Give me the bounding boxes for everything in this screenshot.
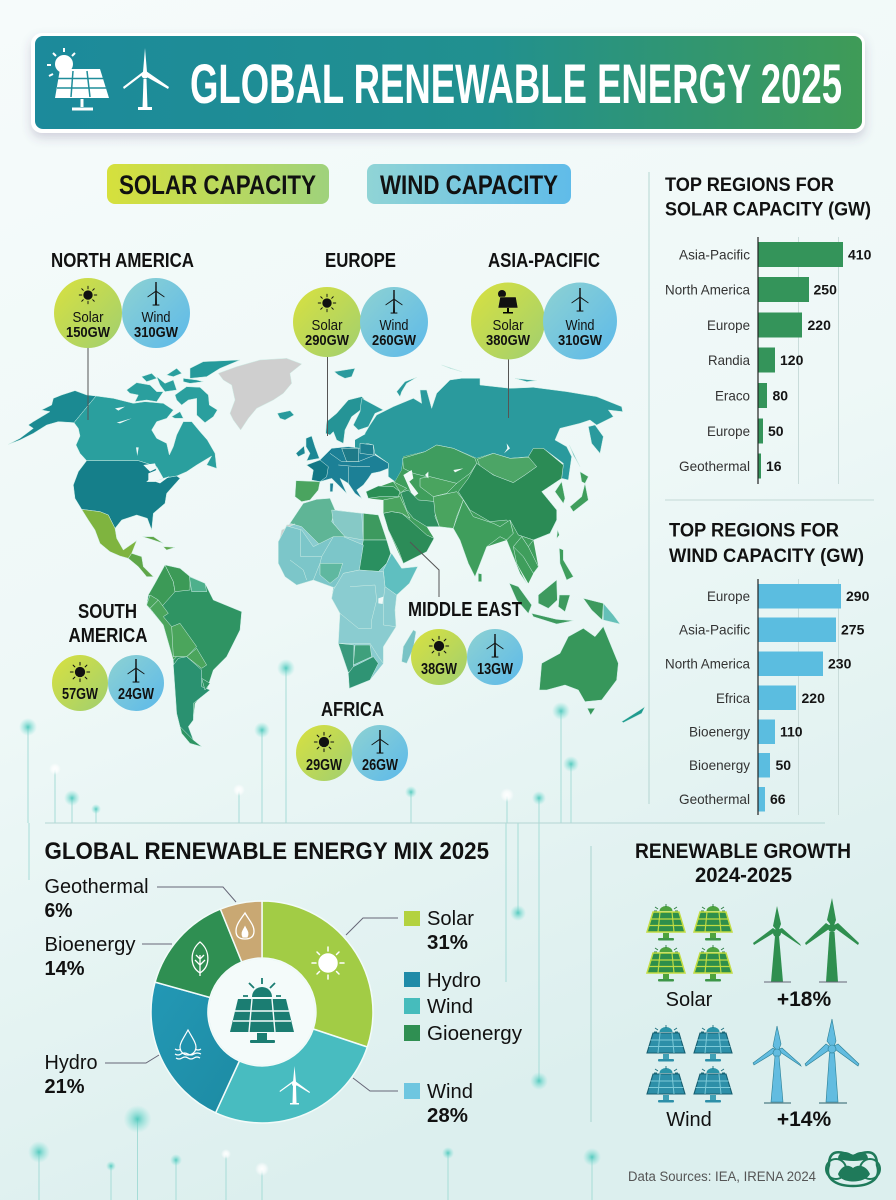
solar panel icons green [647, 904, 732, 982]
icon: water drop [175, 1030, 201, 1059]
callout: africa: 29GW [306, 757, 343, 774]
legend pill: solar capacity [107, 164, 329, 204]
icon: sun and solar panel [47, 48, 109, 109]
bar chart: top regions wind: Bioenergy [689, 757, 750, 773]
bar chart: top regions wind: 66 [770, 791, 786, 807]
eurasia [295, 365, 623, 583]
bar chart: top regions solar: TOP REGIONS FOR [665, 175, 834, 196]
solar panel icons blue [647, 1025, 732, 1102]
sub-saharan africa and oceania [278, 524, 645, 723]
donut labels left: Bioenergy [44, 934, 136, 956]
bar chart: top regions wind: WIND CAPACITY (GW) [669, 546, 864, 567]
bar chart: top regions solar: Randia [708, 352, 750, 368]
callout: north america: NORTH AMERICA [51, 250, 194, 272]
callout: north america: 150GW [66, 324, 111, 341]
bar chart: top regions wind: 230 [828, 656, 852, 672]
callout: north america: Solar [72, 309, 104, 326]
icon: wind turbine [123, 48, 169, 110]
callout: north america: 310GW [134, 324, 179, 341]
bar chart: top regions solar: 80 [772, 388, 788, 404]
bar chart: top regions wind: North America [665, 656, 750, 672]
callout: middle east: 38GW [421, 661, 458, 678]
callout: africa: 26GW [362, 757, 399, 774]
donut labels left: Hydro [44, 1052, 98, 1074]
bar chart: top regions solar: 16 [766, 458, 782, 474]
bar chart: top regions wind: Bioenergy [689, 724, 750, 740]
callout: europe: 290GW [305, 332, 350, 349]
donut legend right: Hydro [427, 970, 481, 992]
legend pill: solar capacity: SOLAR CAPACITY [119, 170, 316, 200]
callout: africa [296, 699, 408, 781]
panel: renewable growth: RENEWABLE GROWTH [635, 840, 851, 863]
bar chart: top regions solar: Europe [707, 423, 750, 439]
callout: asia-pacific: Wind [566, 317, 594, 334]
donut legend right [346, 908, 522, 1127]
bar chart: top regions wind: Efrica [716, 690, 750, 706]
icon: sun [312, 947, 344, 979]
icon: solar panel center [230, 978, 294, 1043]
donut legend right: Solar [427, 908, 474, 930]
callout: middle east: 13GW [477, 661, 514, 678]
callout: africa: AFRICA [321, 699, 384, 721]
donut legend right: 31% [427, 932, 468, 954]
turbines blue [753, 1019, 859, 1103]
bar chart: top regions solar: North America [665, 282, 750, 298]
bar chart: top regions wind: TOP REGIONS FOR [669, 520, 839, 542]
south america [147, 565, 242, 747]
donut labels left: 6% [44, 900, 73, 922]
north america [8, 358, 302, 577]
bar chart: top regions solar: 250 [814, 282, 837, 298]
turbines green [753, 898, 859, 982]
callout: south america [52, 601, 164, 711]
panel: renewable growth: Wind [666, 1109, 712, 1131]
bar chart: top regions solar [665, 175, 872, 484]
bar chart: top regions solar: 410 [848, 246, 872, 262]
bar chart: top regions solar: Europe [707, 317, 750, 333]
callout: europe: 260GW [372, 332, 417, 349]
bar chart: top regions wind: Asia-Pacific [679, 622, 750, 638]
callout: asia-pacific: 380GW [486, 332, 531, 349]
bar chart: top regions solar: 50 [768, 423, 784, 439]
header banner [31, 33, 865, 133]
growth panel divider [590, 846, 592, 1122]
bar chart: top regions wind: 275 [841, 622, 865, 638]
bar chart: top regions wind: 50 [776, 757, 791, 773]
icon: wind turbine [280, 1066, 310, 1104]
donut legend right: Wind [427, 1081, 473, 1103]
bar chart: top regions solar: 220 [808, 317, 831, 333]
callout: asia-pacific: 310GW [558, 332, 603, 349]
callout: asia-pacific [471, 250, 617, 360]
panel: renewable growth [635, 840, 859, 1131]
legend pill: wind capacity: WIND CAPACITY [380, 170, 558, 200]
world map [8, 358, 645, 747]
africa silhouette [278, 498, 418, 688]
north africa [290, 498, 391, 572]
circuit glow lines and dots [19, 659, 601, 1200]
callout: europe: Solar [312, 317, 342, 334]
logo [826, 1152, 880, 1186]
data sources: Data Sources: IEA, IRENA 2024 [628, 1169, 816, 1184]
callout: middle east [408, 599, 523, 685]
bar chart: top regions wind: Europe [707, 588, 750, 604]
icon: flame [236, 913, 254, 939]
bar chart: top regions wind: Geothermal [679, 791, 750, 807]
donut labels left: 14% [44, 958, 85, 980]
donut labels left [44, 876, 236, 1098]
donut legend right: Wind [427, 996, 473, 1018]
icon: leaf [192, 942, 208, 976]
donut labels left: 21% [44, 1076, 85, 1098]
bar chart: top regions wind: 110 [780, 724, 803, 740]
sidebar vertical divider [648, 172, 650, 804]
bar chart: top regions solar: Eraco [715, 388, 750, 404]
callout: south america: SOUTH [78, 601, 137, 623]
callout: asia-pacific: ASIA-PACIFIC [488, 250, 600, 272]
callout: south america: 24GW [118, 686, 155, 703]
callout: north america [51, 250, 194, 348]
panel: renewable growth: +14% [777, 1108, 831, 1131]
donut legend right: 28% [427, 1105, 468, 1127]
callout: asia-pacific: Solar [492, 317, 524, 334]
donut labels left: Geothermal [44, 876, 148, 898]
callout: europe: EUROPE [325, 250, 396, 272]
bar chart: top regions wind: 220 [802, 690, 825, 706]
bar chart: top regions solar: SOLAR CAPACITY (GW) [665, 200, 871, 220]
panel: renewable growth: Solar [666, 989, 713, 1011]
heading: energy mix: GLOBAL RENEWABLE ENERGY MIX 2025 [44, 838, 489, 865]
bar chart: top regions wind: 290 [846, 588, 870, 604]
callout: north america: Wind [142, 309, 170, 326]
leader lines on map [88, 347, 508, 597]
bar chart: top regions solar: Asia-Pacific [679, 246, 750, 262]
bar chart: top regions solar: Geothermal [679, 458, 750, 474]
panel: renewable growth: 2024-2025 [695, 864, 792, 887]
bar chart: top regions wind [665, 520, 870, 815]
callout: middle east: MIDDLE EAST [408, 599, 522, 621]
donut legend right: Gioenergy [427, 1023, 522, 1045]
legend pill: wind capacity [367, 164, 571, 204]
callout: europe [293, 250, 428, 357]
panel: renewable growth: +18% [777, 988, 831, 1011]
bar chart: top regions solar: 120 [780, 352, 804, 368]
callout: south america: 57GW [62, 686, 99, 703]
donut chart: energy mix [151, 901, 373, 1123]
callout: europe: Wind [380, 317, 408, 334]
callout: south america: AMERICA [68, 625, 148, 647]
